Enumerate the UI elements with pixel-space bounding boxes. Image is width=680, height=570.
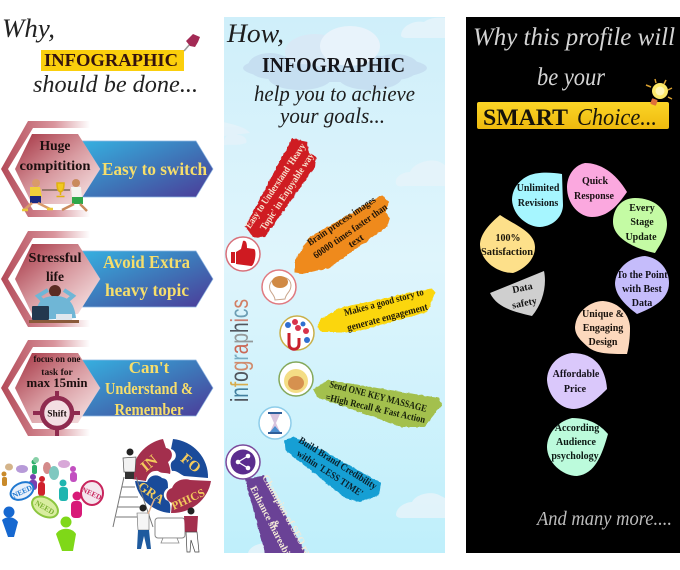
vertical logo: infographics: infographics bbox=[226, 299, 254, 402]
heading: help you to achieve your goals: your goals... bbox=[278, 103, 385, 128]
icon: sun brain bbox=[279, 362, 313, 396]
callout: easy to understand: Easy to Understand 'Heavy bbox=[243, 142, 308, 231]
heading bar: smart choice bbox=[477, 102, 669, 131]
illustration: infographics puzzle bbox=[113, 439, 211, 552]
blob: affordable price: Price bbox=[564, 384, 587, 395]
person in blue bbox=[137, 500, 154, 549]
blob: according audience psychology: psychology bbox=[551, 451, 599, 462]
bubble: green need: NEED bbox=[33, 498, 57, 517]
black background bbox=[466, 17, 680, 553]
panel: how infographic helps achieve goals bbox=[224, 17, 445, 570]
label: huge competition: compitition bbox=[20, 158, 91, 173]
callout: champion of seo ranking: & bbox=[268, 518, 282, 531]
banner text: avoid extra heavy topic: heavy topic bbox=[105, 280, 189, 300]
ladder bbox=[113, 477, 153, 527]
row: huge competition bbox=[1, 121, 213, 217]
blob: to the point: Data bbox=[632, 298, 652, 309]
blob: data safety: safety bbox=[511, 296, 538, 312]
cloud behind heading bbox=[243, 26, 427, 90]
row: focus on one task bbox=[1, 340, 213, 436]
callout: build brand credibility: within 'LESS TIME' bbox=[294, 448, 365, 500]
label: stressful life bbox=[28, 250, 82, 284]
label: huge competition bbox=[20, 138, 91, 173]
blob: unlimited revisions: Unlimited bbox=[517, 183, 560, 194]
blob: according audience psychology bbox=[547, 418, 608, 476]
icon: push pin bbox=[184, 34, 200, 51]
heading: infographic: INFOGRAPHIC bbox=[262, 53, 405, 77]
callout: makes a good story: generate engagement bbox=[346, 302, 430, 334]
blob: unlimited revisions: Revisions bbox=[518, 198, 558, 209]
label: focus on one task: task for bbox=[41, 368, 73, 378]
banner text: avoid extra heavy topic bbox=[103, 252, 190, 300]
banner text: cant understand and remember bbox=[105, 358, 193, 419]
label: focus on one task: max 15min bbox=[26, 375, 88, 390]
blob: every stage update: Stage bbox=[630, 217, 654, 228]
callout: brain process images: Brain process images bbox=[306, 195, 378, 248]
banner text: cant understand and remember: Understand & bbox=[105, 379, 193, 398]
arrow banner bbox=[82, 141, 213, 197]
inner hexagon bbox=[15, 134, 100, 204]
heading bar: smart choice: SMART bbox=[483, 105, 568, 130]
row: stressful life bbox=[1, 231, 213, 327]
small people bbox=[2, 460, 82, 551]
hexagon ring bbox=[1, 231, 90, 327]
closing text: and many more: And many more.... bbox=[535, 508, 672, 530]
illustration: people with need bubbles bbox=[2, 457, 104, 551]
icon: share bbox=[226, 445, 260, 479]
inner hexagon bbox=[15, 244, 100, 314]
icon: target with shift: Shift bbox=[47, 410, 68, 420]
heading: why: Why, bbox=[2, 14, 55, 43]
blob: affordable price bbox=[547, 353, 607, 409]
blob: to the point: To the Point bbox=[616, 270, 668, 281]
hexagon ring bbox=[1, 121, 90, 217]
heading: should be done: should be done... bbox=[33, 72, 198, 98]
panel: why this profile is your smart choice bbox=[466, 17, 680, 553]
blob: according audience psychology: Audience bbox=[556, 437, 597, 448]
banner text: avoid extra heavy topic: Avoid Extra bbox=[103, 252, 190, 272]
label: focus on one task: focus on one bbox=[34, 355, 80, 365]
icon: magnet and likes bbox=[280, 316, 314, 350]
puzzle: fo: FO bbox=[177, 451, 203, 477]
label: focus on one task bbox=[26, 355, 88, 390]
arrow banner bbox=[82, 360, 213, 416]
monitor bbox=[155, 518, 185, 543]
heading: how: How, bbox=[226, 19, 284, 48]
blob: every stage update: Update bbox=[625, 232, 657, 243]
puzzle: gra: GRA bbox=[135, 478, 168, 507]
heading: be your: be your bbox=[537, 64, 605, 91]
callout: brain process images: 60000 times faster than bbox=[311, 202, 390, 261]
callout: makes a good story: Makes a good story to bbox=[343, 287, 425, 319]
blob: unique engaging design bbox=[575, 301, 630, 354]
banner text: cant understand and remember: Remember bbox=[114, 400, 184, 419]
blob: data safety bbox=[490, 271, 545, 316]
blob: quick response: Response bbox=[574, 191, 615, 202]
callout: send one key message: Send ONE KEY MASSAGE bbox=[328, 379, 428, 415]
callout: champion of seo ranking bbox=[245, 475, 310, 553]
blob: unique engaging design: Unique & bbox=[582, 309, 624, 320]
callout: champion of seo ranking: Enhance shareability bbox=[247, 484, 298, 570]
panel: why infographic should be done bbox=[1, 14, 213, 552]
sky background bbox=[224, 17, 445, 553]
heading: why this profile will: Why this profile will bbox=[473, 24, 675, 51]
blob: according audience psychology: According bbox=[555, 423, 599, 434]
person on ladder bbox=[123, 448, 136, 479]
clouds bbox=[224, 18, 445, 553]
icon: light bulb bbox=[646, 79, 672, 106]
blob: unique engaging design: Engaging bbox=[583, 323, 623, 334]
icon: tug of war bbox=[22, 179, 87, 211]
icon: target with shift bbox=[33, 391, 80, 436]
small bubbles bbox=[5, 457, 70, 480]
blob: affordable price: Affordable bbox=[553, 369, 600, 380]
blob: unlimited revisions bbox=[512, 173, 563, 227]
arrow banner bbox=[82, 251, 213, 307]
callout: brain process images: text bbox=[347, 232, 367, 250]
blob: quick response: Quick bbox=[582, 176, 608, 187]
inner hexagon bbox=[15, 353, 100, 423]
callout: brain process images bbox=[295, 195, 390, 274]
blob: unique engaging design: Design bbox=[589, 337, 618, 348]
callout: send one key message: =High Recall & Fast Action bbox=[324, 392, 427, 426]
heading: help you to achieve your goals bbox=[254, 86, 414, 128]
banner text: cant understand and remember: Can't bbox=[129, 358, 170, 377]
icon: hourglass bbox=[259, 407, 291, 439]
label: stressful life: Stressful bbox=[28, 250, 82, 265]
icon: stressed man at desk bbox=[29, 285, 79, 323]
callout: build brand credibility: Build Brand Credibility bbox=[296, 435, 379, 492]
heading: help you to achieve your goals: help you to achieve bbox=[254, 81, 415, 106]
callout: makes a good story bbox=[317, 287, 435, 334]
icon: brain head bbox=[262, 270, 296, 304]
blob: every stage update bbox=[613, 198, 667, 253]
hexagon ring bbox=[1, 340, 90, 436]
blob: data safety: Data bbox=[511, 281, 534, 296]
heading bar: smart choice: Choice... bbox=[577, 105, 657, 131]
banner text: easy to switch: Easy to switch bbox=[102, 159, 207, 179]
callout: easy to understand: Topic' in Enjoyable way bbox=[258, 151, 317, 233]
blob: every stage update: Every bbox=[629, 203, 655, 214]
bubble: blue need: NEED bbox=[11, 483, 34, 500]
icon: thumbs up bbox=[226, 237, 260, 271]
blob: satisfaction: Satisfaction bbox=[481, 247, 533, 258]
blob: satisfaction: 100% bbox=[496, 233, 520, 244]
blob: to the point bbox=[615, 256, 669, 314]
blob: quick response bbox=[567, 163, 627, 217]
puzzle: phics: PHICS bbox=[170, 487, 207, 513]
label: stressful life: life bbox=[46, 269, 64, 284]
blob: to the point: with Best bbox=[622, 284, 663, 295]
person in maroon bbox=[184, 508, 199, 552]
heading: infographic highlight: INFOGRAPHIC bbox=[44, 50, 178, 70]
puzzle: in: IN bbox=[138, 452, 161, 475]
label: huge competition: Huge bbox=[40, 138, 70, 153]
bubble: pink need: NEED bbox=[80, 485, 104, 502]
blob: satisfaction bbox=[480, 215, 535, 273]
